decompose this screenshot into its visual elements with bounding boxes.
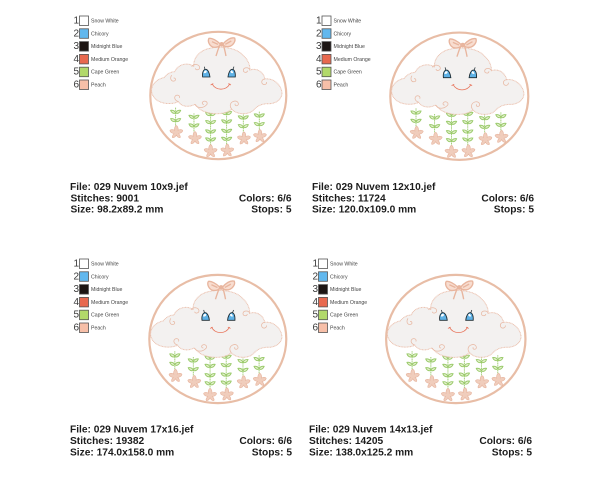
thread colour legend: 5	[74, 67, 80, 78]
thread colour legend: 2	[74, 271, 80, 282]
thread colour legend: Medium Orange	[334, 57, 371, 63]
thread colour legend: Snow White	[334, 18, 361, 24]
thread colour legend: Medium Orange	[91, 57, 128, 63]
file details: Stitches: 11724	[312, 194, 386, 204]
thread colour legend: Midnight Blue	[330, 287, 362, 293]
thread colour legend: Peach	[91, 82, 106, 88]
thread colour legend: 1	[74, 16, 80, 26]
thread colour legend: 4	[316, 54, 322, 65]
thread colour legend: 6	[316, 80, 322, 90]
thread colour legend: 3	[316, 41, 322, 52]
panel: design 14x13	[309, 258, 532, 458]
file details: Colors: 6/6	[239, 436, 292, 447]
file details: File: 029 Nuvem 10x9.jef	[70, 182, 188, 193]
thread colour legend	[74, 258, 128, 334]
thread colour legend: Cape Green	[91, 313, 119, 319]
file details: Stitches: 9001	[70, 194, 139, 204]
thread colour legend	[74, 16, 128, 90]
panel: design 17x16	[70, 258, 292, 458]
thread colour legend: 6	[312, 322, 318, 334]
thread colour legend: Cape Green	[330, 313, 358, 319]
thread colour legend: Cape Green	[91, 70, 119, 76]
thread colour legend: 4	[74, 297, 80, 308]
thread colour legend: Chicory	[334, 31, 351, 37]
thread colour legend: 3	[74, 41, 80, 52]
panel: design 12x10	[312, 16, 534, 216]
thread colour legend: 4	[74, 54, 80, 65]
thread colour legend: Medium Orange	[330, 300, 367, 306]
thread colour legend: Snow White	[91, 262, 119, 268]
file details	[70, 424, 292, 458]
file details: Colors: 6/6	[481, 194, 534, 204]
file details: Stitches: 14205	[309, 436, 384, 447]
file details: Size: 98.2x89.2 mm	[70, 204, 163, 216]
embroidery: cloud in ring	[149, 275, 286, 403]
thread colour legend: 1	[74, 258, 80, 270]
file details: Colors: 6/6	[239, 194, 292, 204]
thread colour legend: 6	[74, 80, 80, 90]
thread colour legend: Snow White	[330, 262, 358, 268]
file details	[70, 182, 292, 216]
thread colour legend: Peach	[91, 326, 106, 332]
thread colour legend: Chicory	[330, 274, 348, 280]
thread colour legend: Chicory	[91, 274, 109, 280]
file details: Size: 174.0x158.0 mm	[70, 448, 174, 458]
thread colour legend: 5	[316, 67, 322, 78]
thread colour legend: Midnight Blue	[91, 44, 123, 50]
file details: Stops: 5	[252, 448, 292, 458]
thread colour legend: 4	[312, 297, 318, 308]
file details: Stops: 5	[492, 448, 532, 458]
embroidery: cloud in ring	[390, 33, 528, 160]
file details: File: 029 Nuvem 12x10.jef	[312, 182, 436, 193]
thread colour legend	[312, 258, 367, 334]
thread colour legend: 5	[312, 310, 318, 321]
thread colour legend: 5	[74, 310, 80, 321]
file details	[309, 424, 532, 458]
file details: Size: 120.0x109.0 mm	[312, 204, 416, 216]
thread colour legend: Midnight Blue	[91, 287, 123, 293]
thread colour legend: 1	[316, 16, 322, 26]
thread colour legend: 6	[74, 322, 80, 334]
thread colour legend: 2	[312, 271, 318, 282]
thread colour legend: 3	[312, 284, 318, 295]
file details: Stops: 5	[494, 204, 534, 216]
file details: File: 029 Nuvem 17x16.jef	[70, 424, 194, 436]
thread colour legend: Chicory	[91, 31, 109, 37]
thread colour legend: Medium Orange	[91, 300, 128, 306]
file details: Size: 138.0x125.2 mm	[309, 448, 413, 458]
file details: Stitches: 19382	[70, 436, 145, 447]
thread colour legend: Midnight Blue	[334, 44, 365, 50]
thread colour legend: Snow White	[91, 18, 119, 24]
embroidery: cloud in ring	[386, 275, 525, 403]
file details: Colors: 6/6	[479, 436, 532, 447]
thread colour legend: Peach	[330, 326, 345, 332]
thread colour legend: 3	[74, 284, 80, 295]
thread colour legend: 2	[316, 28, 322, 39]
thread colour legend: 1	[312, 258, 318, 270]
thread colour legend: Peach	[334, 82, 348, 88]
thread colour legend	[316, 16, 371, 90]
thread colour legend: Cape Green	[334, 70, 362, 76]
thread colour legend: 2	[74, 28, 80, 39]
embroidery: cloud in ring	[150, 32, 286, 159]
file details	[312, 182, 534, 216]
file details: File: 029 Nuvem 14x13.jef	[309, 424, 433, 436]
file details: Stops: 5	[251, 204, 292, 216]
panel: design 10x9	[70, 16, 292, 216]
